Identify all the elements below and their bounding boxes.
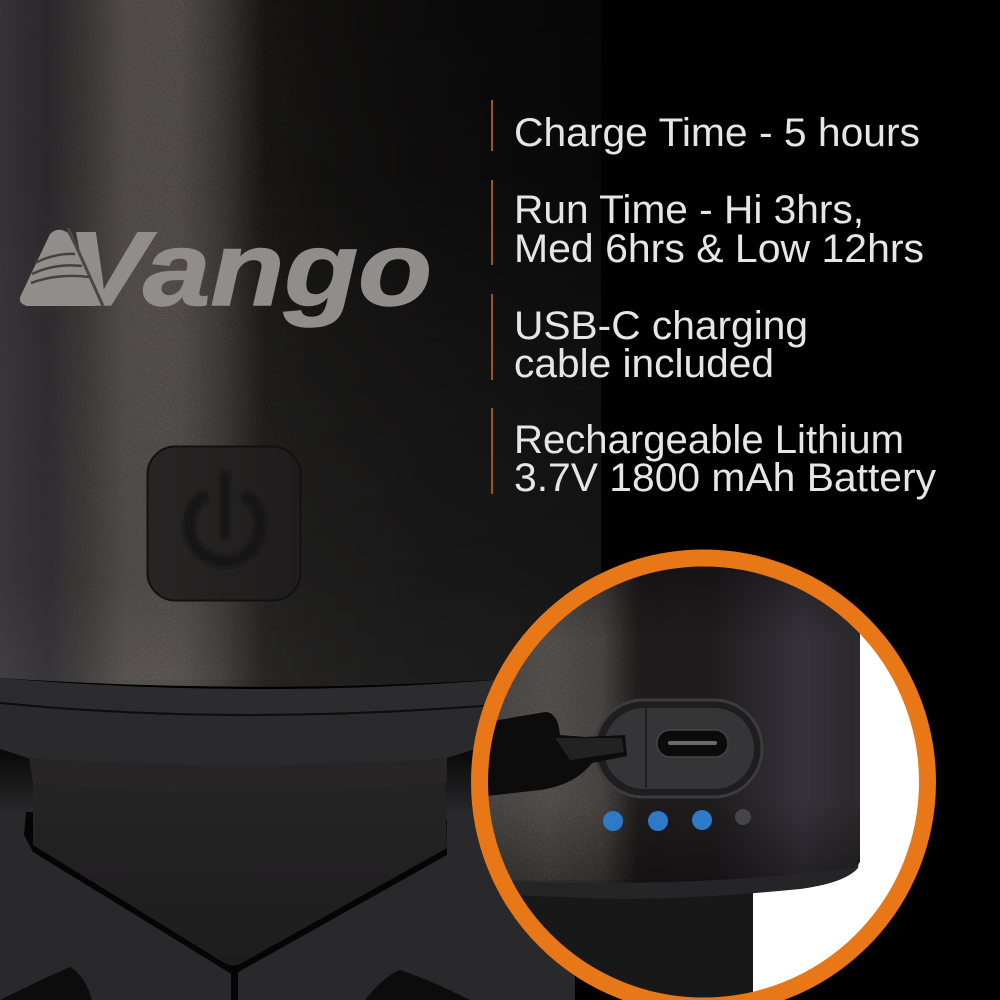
- collar upper band: [0, 678, 520, 714]
- feature: run time: Run Time - Hi 3hrs,: [514, 188, 864, 232]
- base ring: [517, 864, 859, 899]
- Vango logo: [20, 211, 432, 328]
- lower legs: [0, 745, 575, 1000]
- detail callout circle: [470, 550, 940, 1000]
- product photo: lantern body: [0, 0, 601, 1000]
- callout background white: [753, 634, 919, 992]
- feature: battery: 3.7V 1800 mAh Battery: [514, 456, 936, 500]
- feature: USB-C: [491, 294, 808, 386]
- feature list: [491, 100, 936, 500]
- lower cone: [33, 780, 447, 966]
- feature: run time: [491, 180, 924, 271]
- lower grey leg: [470, 880, 530, 1000]
- post: [520, 893, 753, 998]
- USB-C socket: [657, 730, 728, 757]
- charge indicator: three blue, one off: [603, 809, 751, 831]
- feature: run time: Med 6hrs & Low 12hrs: [514, 227, 924, 271]
- feature: USB-C: USB-C charging: [514, 304, 808, 348]
- logo wordmark: Vango: [67, 211, 432, 328]
- feature: USB-C: cable included: [514, 342, 774, 386]
- power button: [147, 446, 301, 601]
- callout ring: [480, 558, 928, 1000]
- charging cable: [488, 712, 627, 796]
- feature: charge time: Charge Time - 5 hours: [514, 111, 920, 155]
- body: [470, 550, 860, 883]
- icon: power symbol: [189, 475, 261, 561]
- main cylinder: [0, 0, 601, 687]
- surface grain: [67, 0, 286, 680]
- feature: battery: Rechargeable Lithium: [514, 418, 904, 462]
- icon: tent triangle: [20, 228, 103, 306]
- USB port surround: [595, 700, 762, 797]
- collar step band: [28, 750, 447, 792]
- feature: battery: [491, 408, 936, 500]
- collar lower band: [0, 703, 520, 765]
- body grain: [488, 578, 642, 880]
